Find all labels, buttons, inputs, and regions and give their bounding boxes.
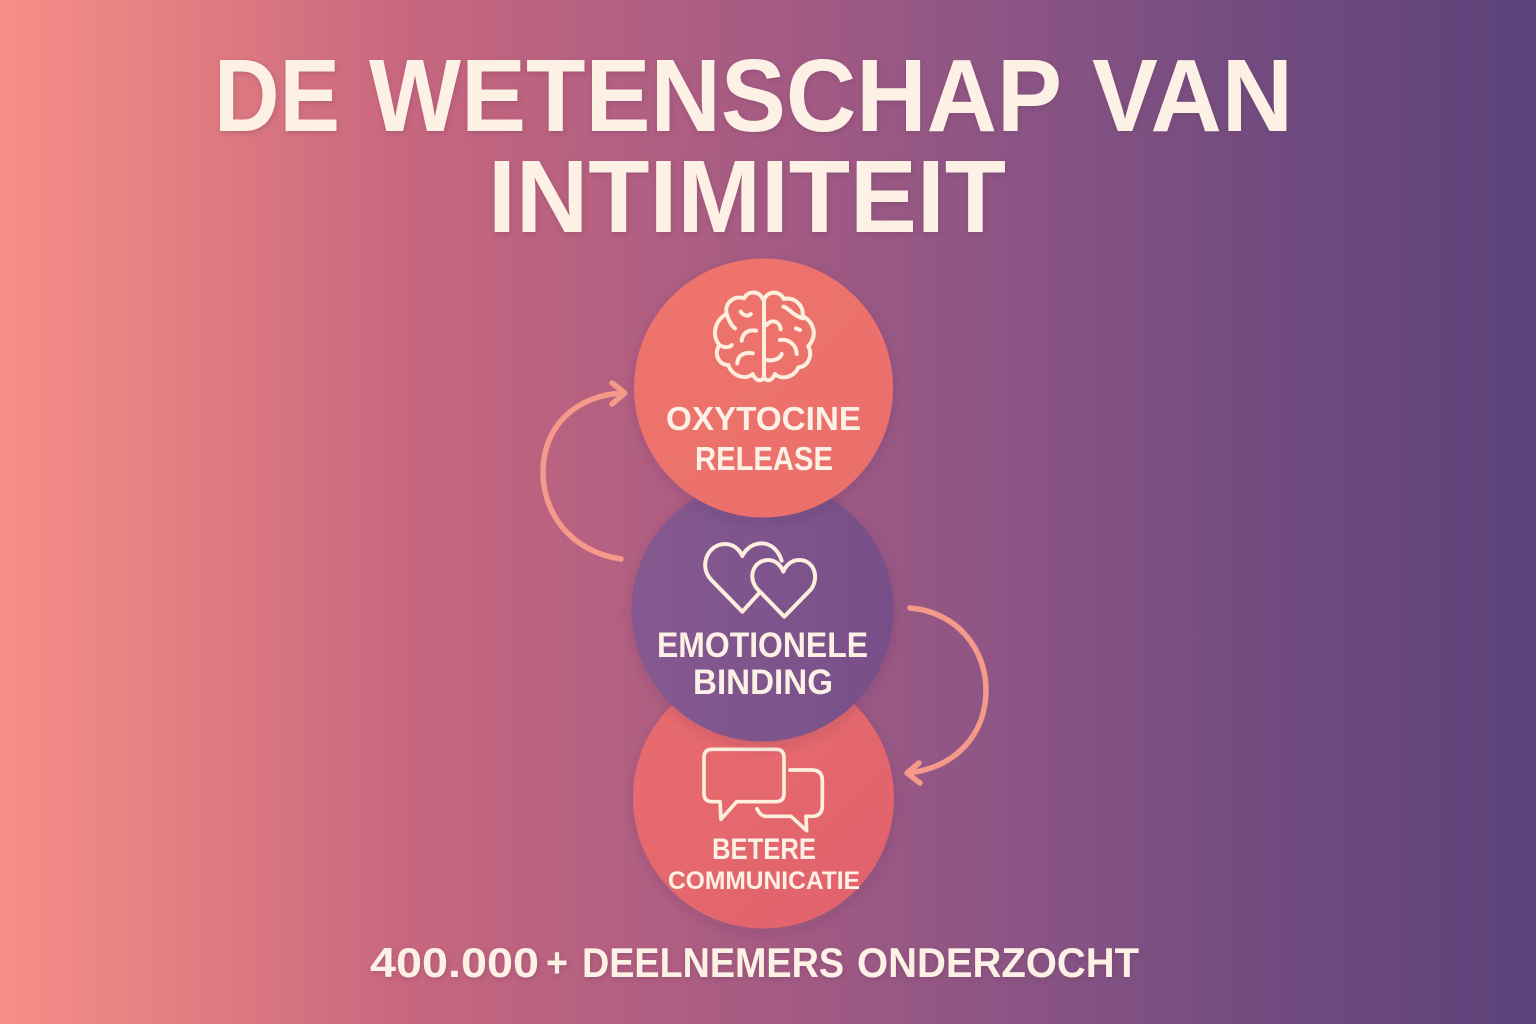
label: betere communicatie (668, 833, 860, 895)
footer statistic: 400.000 (370, 939, 539, 986)
label: betere communicatie: COMMUNICATIE (668, 867, 860, 895)
label: betere communicatie: BETERE (712, 833, 816, 866)
footer statistic (370, 939, 1139, 986)
footer statistic: + (546, 939, 568, 986)
title (214, 38, 1293, 254)
label: emotionele binding (657, 626, 868, 702)
title: DE (214, 38, 340, 153)
label: emotionele binding: EMOTIONELE (657, 626, 868, 665)
footer statistic: DEELNEMERS (582, 939, 844, 986)
panel: emotionele binding (632, 480, 894, 742)
title: VAN (1092, 38, 1293, 153)
label: oxytocine release: RELEASE (695, 440, 833, 477)
title: WETENSCHAP (369, 38, 1062, 153)
icon: brain (715, 293, 814, 380)
label: emotionele binding: BINDING (693, 663, 833, 702)
arrow: from emotionele binding to oxytocine release (543, 383, 625, 559)
icon: two hearts (705, 543, 815, 617)
panel: betere communicatie (633, 668, 894, 928)
label: oxytocine release: OXYTOCINE (666, 400, 861, 437)
footer statistic: ONDERZOCHT (857, 939, 1139, 986)
label: oxytocine release (666, 400, 861, 477)
title: INTIMITEIT (488, 139, 1006, 254)
icon: speech bubbles (704, 749, 822, 831)
arrow: from emotionele binding to betere communicatie (907, 608, 986, 783)
panel: oxytocine release (634, 258, 893, 518)
